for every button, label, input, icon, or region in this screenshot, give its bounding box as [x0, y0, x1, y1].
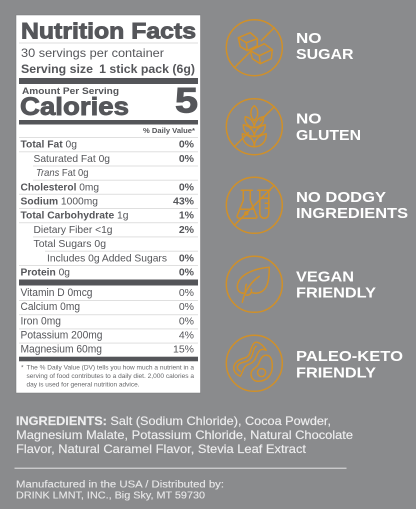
daily value header: % Daily Value*: [143, 128, 195, 135]
ingredients text: Magnesium Malate, Potassium Chloride, Natural Chocolate: [16, 428, 353, 442]
nutrient rows: Dietary Fiber <1g: [34, 224, 113, 236]
footnote: [21, 365, 194, 388]
label: no gluten: GLUTEN: [296, 127, 361, 144]
panel: nutrition facts label: [16, 15, 200, 393]
icon: vegan leaf: [226, 256, 282, 312]
vitamins and minerals: Iron 0mg: [20, 315, 61, 327]
nutrient rows: 0%: [179, 153, 195, 165]
nutrient rows: Total Carbohydrate 1g: [20, 210, 129, 222]
label: paleo-keto friendly: PALEO-KETO: [296, 348, 403, 365]
label: vegan friendly: VEGAN: [296, 269, 354, 286]
nutrient rows: Cholesterol 0mg: [20, 181, 99, 193]
vitamins and minerals: 15%: [173, 344, 194, 356]
icon: no sugar: [226, 20, 282, 76]
label: no dodgy ingredients: INGREDIENTS: [296, 205, 408, 222]
label: no dodgy ingredients: [296, 189, 408, 222]
vitamins and minerals: [20, 287, 194, 356]
nutrient rows: Sodium 1000mg: [20, 196, 98, 208]
vitamins and minerals: Vitamin D 0mcg: [20, 287, 92, 299]
ingredients text: INGREDIENTS: Salt (Sodium Chloride), Cocoa Powder,: [16, 414, 331, 428]
nutrient rows: Includes 0g Added Sugars: [47, 252, 167, 264]
vitamins and minerals: Calcium 0mg: [20, 301, 80, 313]
icon: bacon and egg: [226, 335, 282, 391]
nutrient rows: [20, 138, 195, 278]
servings per container: 30 servings per container: [21, 46, 164, 60]
serving size: Serving size 1 stick pack (6g): [21, 62, 195, 76]
label: paleo-keto friendly: [296, 348, 403, 381]
nutrient rows: 0%: [179, 138, 195, 150]
nutrient rows: 1%: [179, 210, 195, 222]
vitamins and minerals: 0%: [179, 315, 194, 327]
label: vegan friendly: [296, 269, 376, 302]
nutrient rows: 43%: [173, 196, 195, 208]
vitamins and minerals: 0%: [179, 301, 194, 313]
footnote: *: [21, 365, 24, 372]
label: paleo-keto friendly: FRIENDLY: [296, 364, 376, 381]
footnote: serving of food contributes to a daily diet. 2,000 calories a: [26, 373, 194, 380]
icon: no dodgy ingredients: [226, 177, 282, 233]
nutrient rows: 0%: [179, 181, 195, 193]
nutrient rows: 2%: [179, 224, 195, 236]
label: vegan friendly: FRIENDLY: [296, 284, 376, 302]
manufacturer text: Manufactured in the USA / Distributed by:: [16, 480, 224, 491]
nutrient rows: Total Fat 0g: [20, 138, 77, 150]
vitamins and minerals: 0%: [179, 287, 194, 299]
vitamins and minerals: Potassium 200mg: [20, 330, 102, 342]
footnote: The % Daily Value (DV) tells you how much a nutrient in a: [26, 365, 194, 372]
manufacturer text: [16, 480, 224, 502]
label: no dodgy ingredients: NO DODGY: [296, 189, 386, 206]
manufacturer text: DRINK LMNT, INC., Big Sky, MT 59730: [16, 491, 205, 502]
ingredients text: [16, 414, 353, 456]
ingredients text: Flavor, Natural Caramel Flavor, Stevia Leaf Extract: [16, 442, 307, 456]
label: no sugar: SUGAR: [296, 46, 354, 63]
calories: Calories: [20, 93, 129, 121]
icon: no gluten: [226, 99, 282, 155]
vitamins and minerals: 4%: [179, 330, 194, 342]
label: no gluten: NO: [296, 111, 322, 128]
calories value: 5: [175, 82, 198, 120]
amount per serving: Amount Per Serving: [22, 86, 119, 97]
nutrient rows: Saturated Fat 0g: [34, 153, 110, 165]
label: no sugar: NO: [296, 30, 322, 47]
title: Nutrition Facts: [21, 18, 196, 43]
label: no sugar: [296, 30, 354, 63]
label: no gluten: [296, 111, 361, 144]
footnote: day is used for general nutrition advice.: [26, 381, 140, 388]
nutrient rows: Protein 0g: [20, 266, 70, 278]
nutrient rows: Trans Fat 0g: [36, 167, 89, 179]
nutrient rows: Total Sugars 0g: [34, 238, 106, 250]
vitamins and minerals: Magnesium 60mg: [20, 344, 102, 356]
nutrient rows: 0%: [179, 266, 195, 278]
nutrient rows: 0%: [179, 252, 195, 264]
